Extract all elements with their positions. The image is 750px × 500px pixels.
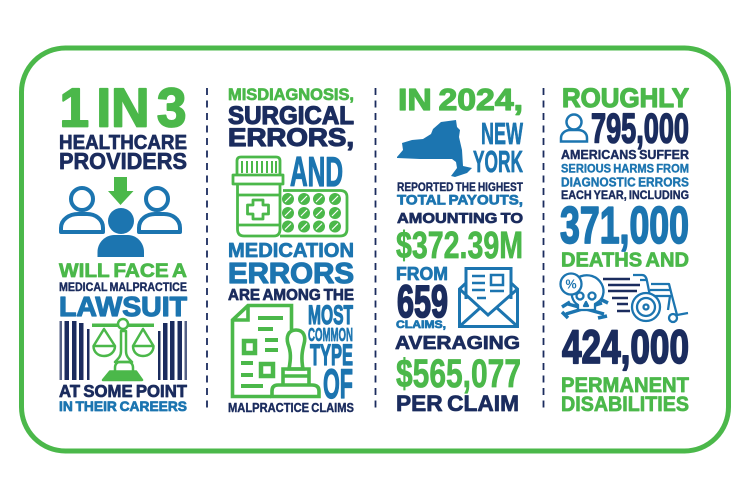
text: serious harms from: SERIOUS HARMS FROM [561,162,689,176]
text: providers: PROVIDERS [59,148,187,174]
text: medication: MEDICATION [228,240,354,262]
icon: providers with arrow [61,177,180,257]
text: medical malpractice: MEDICAL MALPRACTICE [59,282,187,294]
icon: person outline [561,114,587,142]
barcode bars [60,321,187,380]
text: permanent: PERMANENT [561,374,689,397]
text: healthcare: HEALTHCARE [59,131,187,154]
figure: 372.39M: $372.39M [396,225,523,267]
text: will face a: WILL FACE A [59,261,187,282]
text: disabilities: DISABILITIES [561,393,689,416]
heading: roughly: ROUGHLY [562,83,689,113]
panel: 1 in 3 providers [59,76,187,414]
text: americans suffer: AMERICANS SUFFER [561,148,689,162]
text: averaging: AVERAGING [395,332,520,353]
icon: document and stamp [232,306,319,396]
text: york: YORK [473,144,523,179]
text: new: NEW [481,116,523,151]
text: lawsuit: LAWSUIT [59,291,187,322]
icon: pill bottle [233,157,283,236]
text: claims: CLAIMS, [396,319,446,331]
text: malpractice claims: MALPRACTICE CLAIMS [228,401,354,415]
text: reported the highest: REPORTED THE HIGHEST [397,180,524,194]
text: total payouts: TOTAL PAYOUTS, [397,192,523,208]
outer rounded frame [22,48,728,451]
text: deaths and: DEATHS AND [561,250,689,272]
text: diagnostic errors: DIAGNOSTIC ERRORS [561,176,689,190]
text: from: FROM [396,263,448,284]
figure: 371,000: 371,000 [560,197,689,255]
text: surgical: SURGICAL [228,102,354,130]
text: per claim: PER CLAIM [396,391,519,416]
panel: New York payouts [395,82,524,416]
text: misdiagnosis: MISDIAGNOSIS, [228,86,354,104]
figure: 424,000: 424,000 [562,320,689,373]
text: common: COMMON [308,324,353,345]
heading: in 2024: IN 2024, [398,82,523,117]
text: in their careers: IN THEIR CAREERS [59,398,187,414]
text: of: OF [323,360,353,407]
icon: skull and wheelchair: % [565,278,577,292]
text: errors: ERRORS [228,258,354,290]
figure: 565,077: $565,077 [396,352,521,396]
text: type: TYPE [310,339,353,372]
text: each year including: EACH YEAR, INCLUDING [561,190,689,202]
icon: scales of justice [92,319,154,380]
panel: diagnostic error harms [560,83,689,416]
icon: New York state map [397,120,472,177]
text: most: MOST [308,300,353,330]
text: and: AND [290,148,343,195]
text: errors: ERRORS, [228,124,354,152]
panel: common errors [228,86,354,415]
icon: envelope with letter [460,268,518,326]
text: amounting to: AMOUNTING TO [397,210,523,227]
figure: 795,000: 795,000 [591,104,689,152]
text: at some point: AT SOME POINT [59,381,187,401]
heading: 1 in 3: 1 IN 3 [60,76,186,138]
icon: blister pack [280,190,347,236]
figure: 659: 659 [397,276,448,327]
icon: skull and wheelchair [560,274,688,322]
text: are among the: ARE AMONG THE [228,287,354,304]
